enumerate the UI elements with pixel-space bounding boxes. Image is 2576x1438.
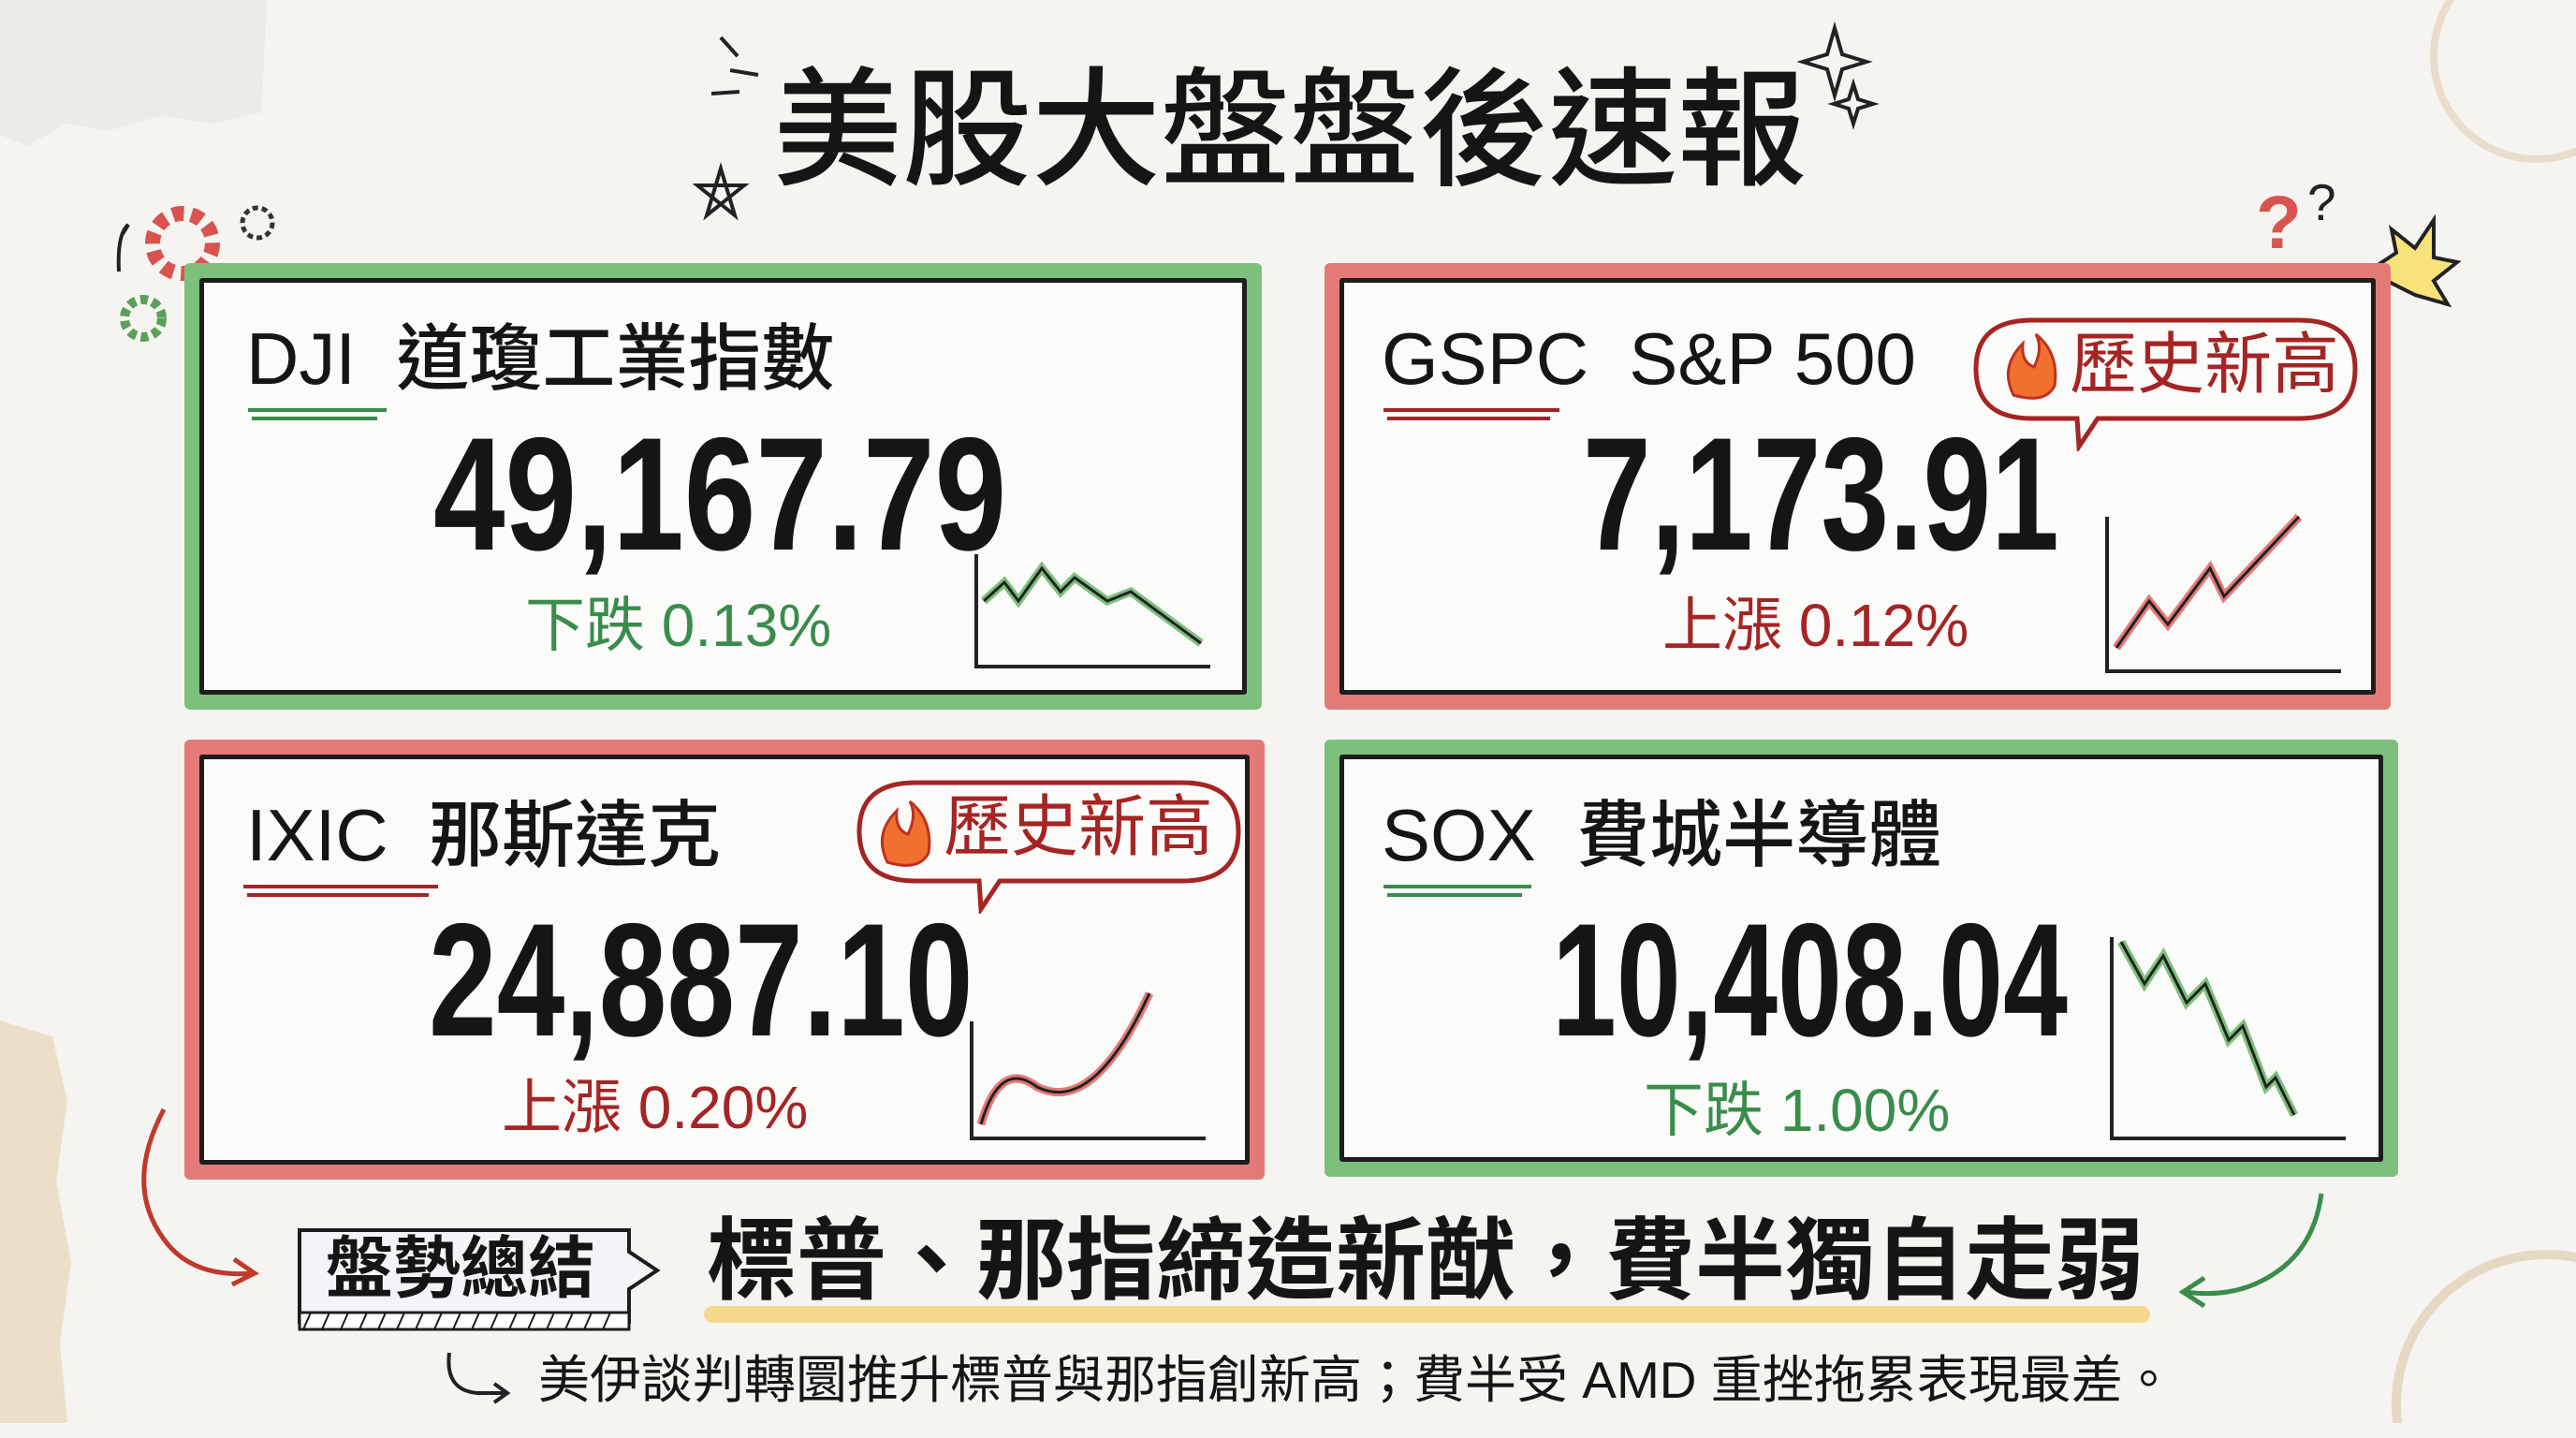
underline [1383,408,1559,420]
summary tag [298,1228,661,1331]
badge: record high: 歷史新高 [944,790,1213,865]
summary tag: 盤勢總結 [326,1232,595,1307]
badge: record high: 歷史新高 [2070,328,2339,403]
summary headline: 標普、那指締造新猷，費半獨自走弱 [707,1211,2144,1312]
icon: question marks and burst: ? [2307,173,2336,231]
value: 7,173.91 [1583,404,2059,584]
label: GSPC: GSPC S&P 500 [1382,317,1916,400]
change: 下跌 0.13% [525,592,831,659]
panel: SOX [1325,740,2398,1177]
label: SOX: SOX 費城半導體 [1382,794,1941,876]
icon: gears [116,206,275,342]
change: 上漲 0.20% [502,1074,808,1141]
chart: curve up [970,991,1206,1140]
panel: DJI [184,263,1262,710]
title: 美股大盤盤後速報 [773,25,1807,213]
change: 下跌 1.00% [1644,1077,1950,1144]
decoration: coffee stain bottom-right [2392,1250,2576,1423]
arrow: small hook [446,1352,511,1404]
arrow: left curved red [141,1108,259,1286]
summary detail: 美伊談判轉圜推升標普與那指創新高；費半受 AMD 重挫拖累表現最差。 [538,1351,2174,1409]
change: 上漲 0.12% [1662,592,1969,659]
icon: question marks and burst [2256,173,2462,307]
badge: record high [857,781,1241,914]
value: 24,887.10 [429,890,973,1070]
badge: record high [1973,318,2357,451]
decoration: tape bottom-left [0,1020,75,1423]
icon: question marks and burst: ? [2256,181,2302,264]
icon: sparkles and star [693,22,1880,221]
chart: steep down [2110,937,2346,1140]
label: IXIC: IXIC 那斯達克 [246,794,721,876]
underline [243,885,438,897]
arrow: right curved green [2179,1193,2323,1309]
value: 10,408.04 [1552,890,2068,1070]
panel: IXIC [184,740,1265,1180]
decoration: coffee stain top-right [2430,0,2576,163]
underline [248,408,387,420]
panel: GSPC [1325,263,2391,710]
chart: up [2105,514,2341,673]
decoration: torn paper top-left [0,0,267,146]
label: DJI: DJI 道瓊工業指數 [246,317,834,400]
underline [1383,885,1531,897]
highlight underline [704,1306,2150,1323]
value: 49,167.79 [433,404,1006,584]
chart: down [974,554,1210,668]
